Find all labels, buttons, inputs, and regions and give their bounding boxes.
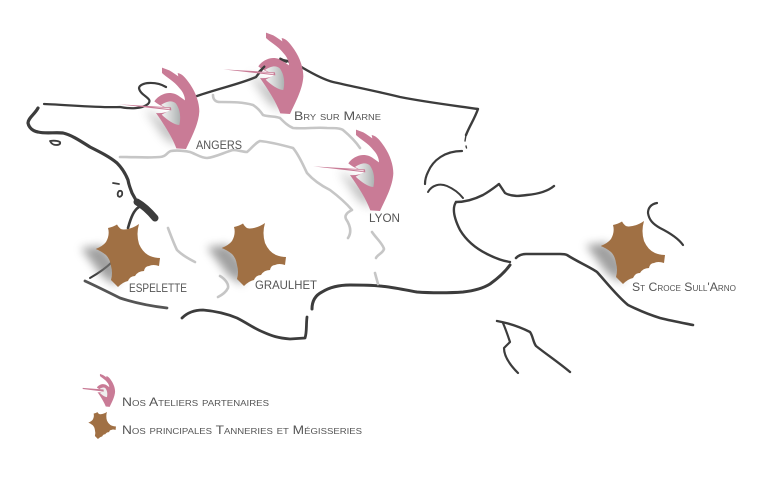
icon: atelier hand, Angers <box>119 68 199 149</box>
label: Espelette: ESPELETTE <box>129 281 187 295</box>
icon: legend hide <box>88 412 116 439</box>
label: Graulhet: GRAULHET <box>255 278 318 292</box>
legend text: tanneries: Nos principales Tanneries et Mégisseries <box>122 425 362 437</box>
legend: ateliers partenaires <box>83 374 269 409</box>
map: coastline and borders <box>28 60 693 373</box>
label: Bry sur Marne: Bry sur Marne <box>294 109 381 123</box>
label: Angers: ANGERS <box>196 138 242 152</box>
icon: atelier hand, Bry sur Marne <box>223 33 303 114</box>
icon: atelier hand, Lyon <box>313 130 393 211</box>
label: St Croce Sull'Arno: St Croce Sull'Arno <box>632 280 736 294</box>
icon: leather hide, Graulhet <box>207 223 286 286</box>
legend text: ateliers: Nos Ateliers partenaires <box>122 397 269 409</box>
icon: legend hand <box>83 374 115 407</box>
icon: leather hide, St Croce <box>586 221 665 284</box>
map: grey rivers <box>120 95 384 297</box>
legend: tanneries et mégisseries <box>88 412 362 439</box>
label: Lyon: LYON <box>369 211 400 225</box>
icon: leather hide, Espelette <box>81 224 160 287</box>
